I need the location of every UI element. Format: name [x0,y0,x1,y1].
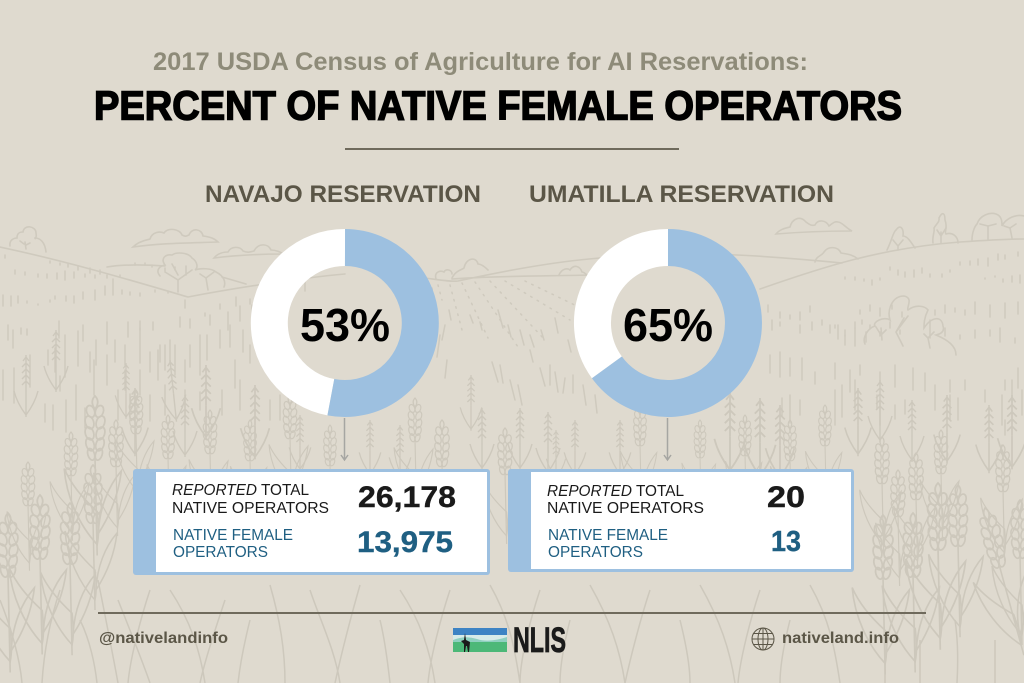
heading: Umatilla: UMATILLA RESERVATION [529,181,834,208]
stats box: Navajo: NATIVE OPERATORS [172,500,329,517]
stats box: Umatilla: 20 [767,481,805,514]
donut chart: 53%: 53% [300,299,390,351]
trees [10,227,46,252]
website: nativeland.info [782,630,899,647]
logo [453,621,566,660]
logo: NLIS [513,621,566,660]
icon: globe [752,628,774,650]
lower leaves [0,580,995,683]
panel: Umatilla Reservation [508,181,854,572]
stats box: Umatilla: REPORTED TOTAL [547,483,684,500]
arrow [341,418,348,460]
hills [0,213,1024,355]
subtitle: 2017 USDA Census of Agriculture for AI Reservations: [153,48,808,76]
panel: Navajo Reservation [133,181,490,575]
donut chart: 53% [269,247,420,398]
field rows [3,252,1022,435]
stats box: Umatilla: NATIVE OPERATORS [547,500,704,517]
title: PERCENT OF NATIVE FEMALE OPERATORS [94,82,902,128]
stats box: Navajo [133,469,490,575]
stats box: Navajo: NATIVE FEMALE [173,527,293,544]
donut chart: 65% [592,248,743,398]
title divider [345,148,679,150]
arrow [664,418,671,460]
handle: @nativelandinfo [99,630,228,647]
stats box: Umatilla: 13 [771,526,801,558]
footer [98,612,926,660]
stats box: Umatilla: OPERATORS [548,544,643,561]
heading: Navajo: NAVAJO RESERVATION [205,181,481,208]
stats box: Umatilla [508,469,854,572]
stats box: Navajo: 26,178 [358,481,456,514]
wheat stalks [0,330,1024,674]
stats box: Navajo: OPERATORS [173,544,268,561]
clouds [133,229,218,247]
donut chart: 65%: 65% [623,299,713,351]
converging centre rows [432,281,585,350]
stats box: Navajo: REPORTED TOTAL [172,482,309,499]
stats box: Umatilla: NATIVE FEMALE [548,527,668,544]
stats box: Navajo: 13,975 [357,526,453,559]
